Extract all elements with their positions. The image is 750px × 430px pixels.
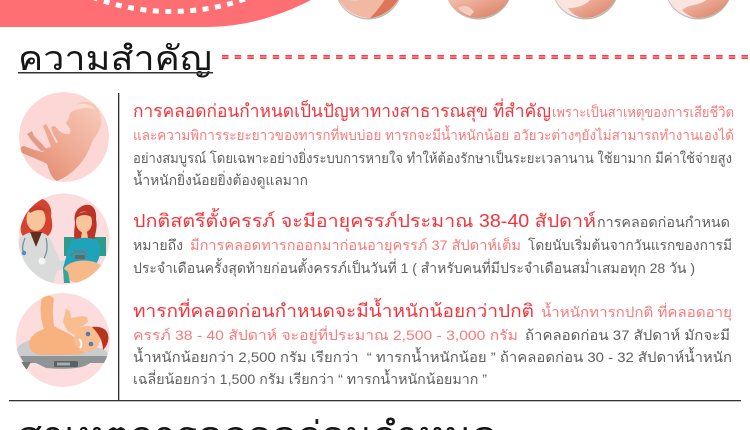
text block: normal gestation and definition: หมายถึง <box>133 237 183 253</box>
section divider <box>9 400 741 401</box>
text block: low birth weight: เฉลี่ยน้อยกว่า 1,500 กรัม เรียกว่า “ ทารกน้ำหนักน้อยมาก ” <box>133 369 487 387</box>
text block: normal gestation and definition <box>133 208 732 277</box>
text block: preterm birth as a public health problem: เพราะเป็นสาเหตุของการเสียชีวิต <box>552 103 734 121</box>
icon: doctor and pregnant patient <box>18 193 110 285</box>
text block: low birth weight: ถ้าคลอดก่อน 37 สัปดาห์ มักจะมี <box>525 327 730 343</box>
icon: baby on scale <box>16 293 110 387</box>
text block: preterm birth as a public health problem: การคลอดก่อนกำหนดเป็นปัญหาทางสาธารณสุข ที่สำคัญ <box>133 98 551 122</box>
text block: normal gestation and definition: มีการคลอดทารกออกมาก่อนอายุครรภ์ 37 สัปดาห์เต็ม <box>190 236 521 254</box>
text block: low birth weight: ทารกที่คลอดก่อนกำหนดจะมีน้ำหนักน้อยกว่าปกติ <box>133 298 534 321</box>
text block: low birth weight: น้ำหนักน้อยกว่า 2,500 กรัม เรียกว่า “ ทารกน้ำหนักน้อย ” ถ้าคลอดก่อน 30 - 32 สัปดาห์น้ำหนัก <box>133 347 732 365</box>
text block: low birth weight: ครรภ์ 38 - 40 สัปดาห์ จะอยู่ที่ประมาณ 2,500 - 3,000 กรัม <box>133 326 518 344</box>
header banner <box>0 0 311 27</box>
fetal stage circles <box>334 0 732 20</box>
text block: preterm birth as a public health problem <box>133 98 734 189</box>
icon: fetus <box>19 92 109 182</box>
text block: normal gestation and definition: การคลอดก่อนกำหนด <box>597 214 730 230</box>
text block: normal gestation and definition: โดยนับเริ่มต้นจากวันแรกของการมี <box>528 236 732 253</box>
text block: normal gestation and definition: ประจำเดือนครั้งสุดท้ายก่อนตั้งครรภ์เป็นวันที่ 1 ( สำหรับคนที่มีประจำเดือนสม่ำเสมอทุก 28 วัน ) <box>133 258 695 277</box>
title: importance: ความสำคัญ <box>18 40 212 78</box>
red dashed heading rule <box>222 56 749 58</box>
text block: preterm birth as a public health problem: น้ำหนักยิ่งน้อยยิ่งต้องดูแลมาก <box>133 170 308 189</box>
text block: low birth weight <box>133 298 732 387</box>
text block: normal gestation and definition: ปกติสตรีตั้งครรภ์ จะมีอายุครรภ์ประมาณ 38-40 สัปดาห์ <box>133 208 596 232</box>
text block: preterm birth as a public health problem: และความพิการระยะยาวของทารกที่พบบ่อย ทารกจะมีน้ำหนักน้อย อวัยวะต่างๆยังไม่สามารถทำงานเองได้ <box>133 125 734 143</box>
vertical divider <box>118 93 119 400</box>
text block: low birth weight: น้ำหนักทารกปกติ ที่คลอดอายุ <box>541 302 732 321</box>
